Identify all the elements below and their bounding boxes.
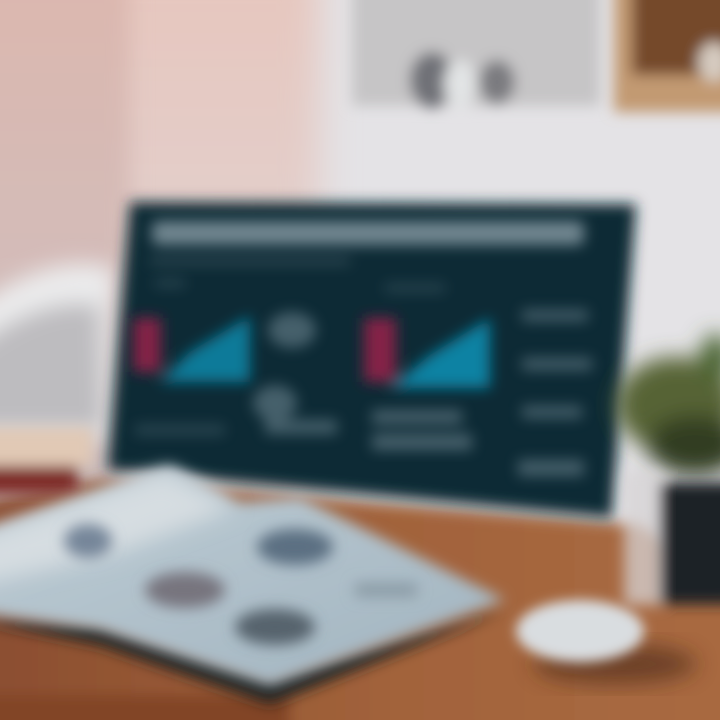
wall shelf xyxy=(352,0,600,108)
left shaded wall xyxy=(0,0,130,540)
magazine shadow xyxy=(0,610,505,704)
open magazine xyxy=(0,466,505,704)
magazine pictures xyxy=(64,524,417,645)
magazine pages xyxy=(0,466,505,686)
dashboard heading xyxy=(150,221,584,264)
centre labels xyxy=(135,312,337,435)
right column list xyxy=(518,310,592,476)
right chart xyxy=(364,285,490,388)
tablet body xyxy=(108,202,636,518)
mouse shadow xyxy=(533,644,697,684)
lower text block xyxy=(372,410,472,450)
plant xyxy=(616,334,720,475)
left chart xyxy=(133,280,250,382)
pot xyxy=(624,470,720,605)
tablet screen with dashboard xyxy=(108,202,636,518)
wooden box at top right xyxy=(614,0,720,112)
white chair xyxy=(0,264,114,440)
mouse xyxy=(516,600,644,662)
magazine left highlight xyxy=(0,472,235,585)
books on left xyxy=(0,428,92,494)
desk xyxy=(0,480,720,720)
background: pink wall xyxy=(0,0,320,540)
